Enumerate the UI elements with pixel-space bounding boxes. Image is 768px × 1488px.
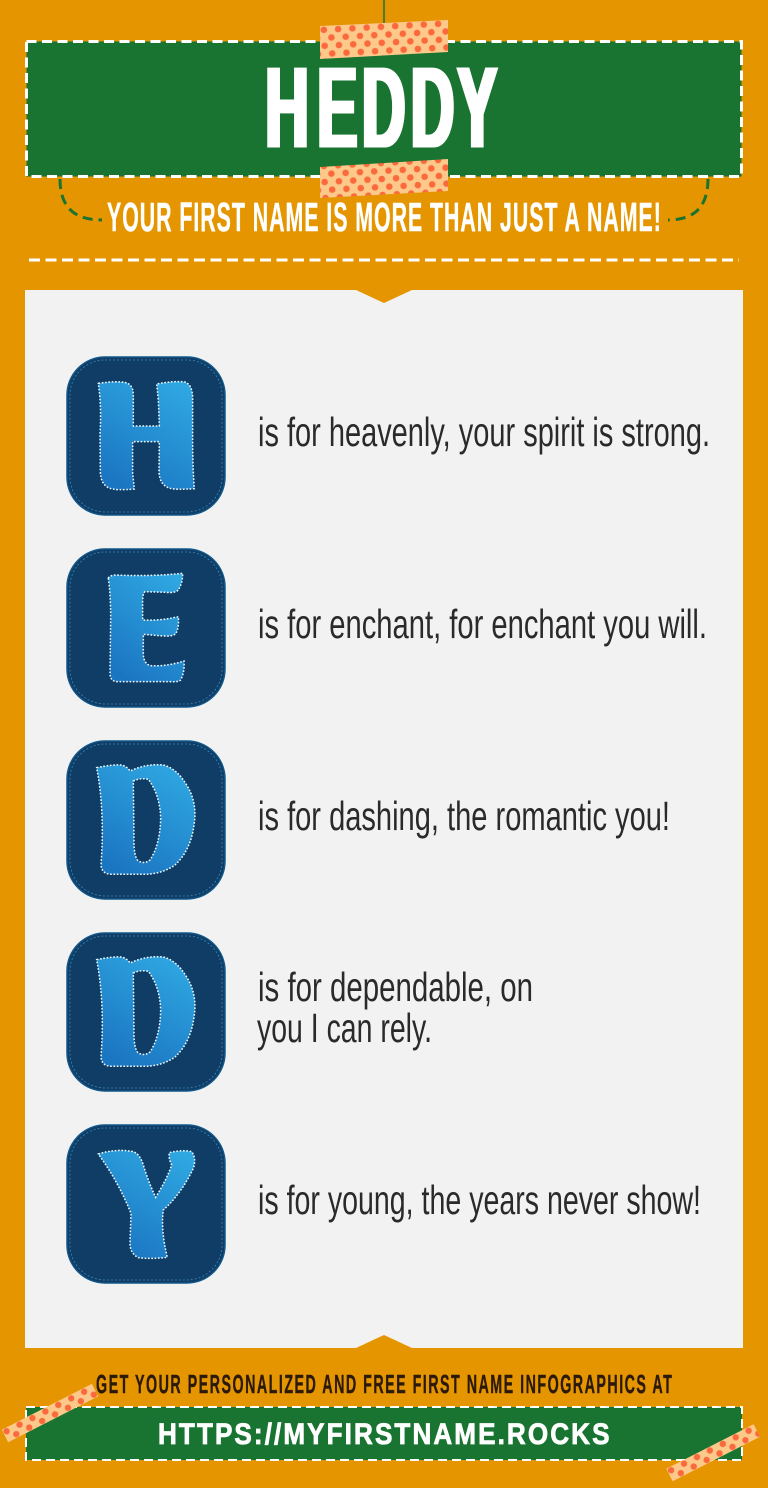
text: second D lines: is for dependable, on (258, 964, 533, 1010)
notch: top (356, 290, 412, 303)
notch: bottom (356, 1335, 412, 1348)
dashed connector left (60, 179, 102, 220)
row: H (67, 357, 710, 515)
tape: bottom (320, 159, 448, 198)
icon: letter H (67, 357, 225, 515)
banner panel (26, 42, 742, 176)
text: second D lines (257, 964, 533, 1051)
subtitle: YOUR FIRST NAME IS MORE THAN JUST A NAME! (107, 193, 661, 240)
footer banner (26, 1407, 742, 1460)
row: E (67, 549, 707, 707)
footer panel (26, 1407, 742, 1460)
tape: footer left (2, 1384, 98, 1442)
icon: letter E (67, 549, 225, 707)
panel background (25, 290, 743, 1348)
row: second D (67, 933, 533, 1091)
panel: letters (25, 290, 743, 1348)
tape: top (320, 20, 448, 59)
title banner (26, 20, 742, 198)
row: Y (67, 1125, 701, 1283)
dashed connector right (668, 179, 708, 220)
hanging string (383, 0, 385, 24)
footer url: HTTPS://MYFIRSTNAME.ROCKS (158, 1417, 610, 1450)
icon: letter D (67, 933, 225, 1091)
footer call to action: GET YOUR PERSONALIZED AND FREE FIRST NAME INFOGRAPHICS AT (96, 1371, 672, 1399)
row: D (67, 741, 670, 899)
title: HEDDY (265, 42, 497, 173)
icon: letter D (67, 741, 225, 899)
dashed separator (29, 258, 739, 262)
tape: footer right (666, 1424, 760, 1481)
icon: letter Y (67, 1125, 225, 1283)
text: second D lines: you I can rely. (257, 1005, 432, 1051)
